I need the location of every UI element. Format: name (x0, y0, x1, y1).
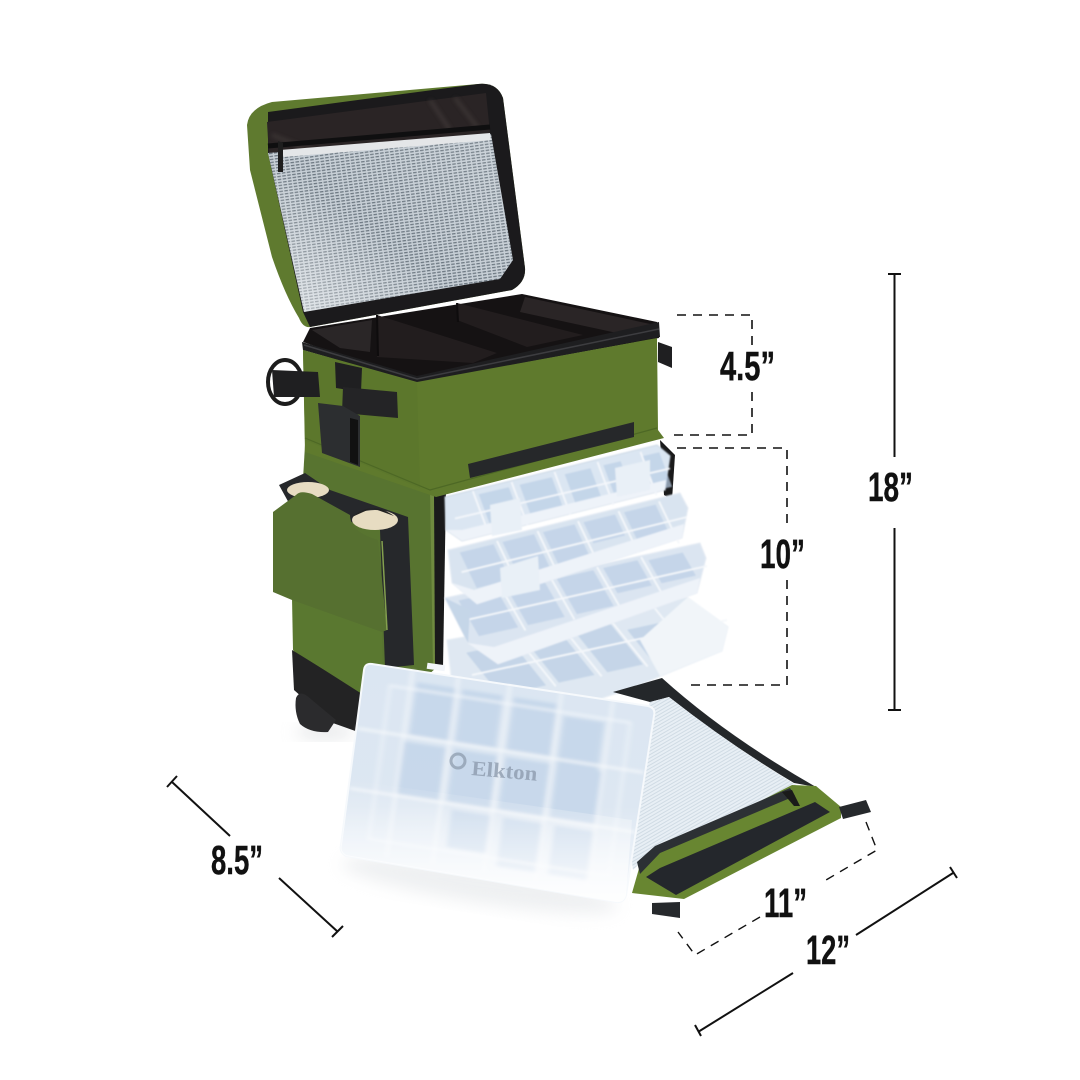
tray 3 (445, 543, 719, 664)
dimension: 11 inch flap width: 11” (764, 880, 807, 926)
dimension: 4.5 inch height: 4.5” (720, 343, 775, 389)
dimension: 10 inch height (677, 448, 805, 685)
zipper rim (302, 322, 660, 383)
flap zipper (637, 788, 795, 874)
green front (303, 338, 664, 497)
velcro strip (468, 422, 634, 478)
lower pocket (292, 598, 383, 694)
flat clear tray (341, 663, 654, 902)
lower body, side panel (292, 445, 440, 735)
flap mesh (620, 697, 796, 870)
lid green shell (247, 84, 525, 327)
pocket flap (273, 492, 387, 632)
dimension: 18 inch height (868, 274, 913, 710)
tray 4 (447, 595, 747, 712)
tray 1 (445, 445, 678, 541)
upper compartment (268, 294, 672, 497)
dividers (377, 315, 497, 363)
lid mesh pocket (268, 134, 513, 312)
tray latch (427, 663, 445, 671)
dimension: 8.5 inch depth: 8.5” (211, 837, 263, 883)
black base (292, 650, 362, 733)
buckle (318, 403, 360, 467)
tube right (352, 510, 398, 530)
interior (303, 294, 659, 382)
dimension: 4.5 inch height (672, 315, 775, 435)
bag lid, open (247, 84, 525, 327)
lid lining (267, 93, 490, 156)
tray bottom fade (341, 780, 632, 902)
lid black frame (268, 84, 525, 327)
lid zipper (268, 127, 490, 146)
flap green edge (632, 785, 841, 899)
brand mark on tray (451, 754, 465, 768)
flap black border (613, 678, 816, 787)
dimension: 18 inch height: 18” (868, 464, 913, 510)
velcro patch (646, 802, 830, 895)
black holder (279, 473, 414, 668)
ground shadow (295, 726, 621, 925)
front opening edge (434, 440, 675, 668)
dimension: 11 inch flap width (678, 822, 877, 955)
strap right (839, 800, 871, 819)
brand name: Elkton (471, 756, 539, 786)
side strap and rings (268, 360, 320, 404)
dimension: 12 inch width: 12” (806, 927, 850, 973)
tray compartment shading (341, 663, 653, 894)
tube left (287, 482, 329, 498)
side pocket with tubes (273, 473, 414, 694)
open door flap with mesh pocket (613, 678, 871, 918)
wheel (296, 693, 336, 732)
buckle strap (335, 362, 362, 392)
dimension: 10 inch height: 10” (760, 531, 805, 577)
right strap (658, 342, 672, 368)
tray 2 (448, 493, 697, 604)
dimension: 12 inch width (695, 867, 957, 1036)
strap bottom (652, 902, 680, 918)
dimension: 8.5 inch depth (167, 776, 343, 937)
